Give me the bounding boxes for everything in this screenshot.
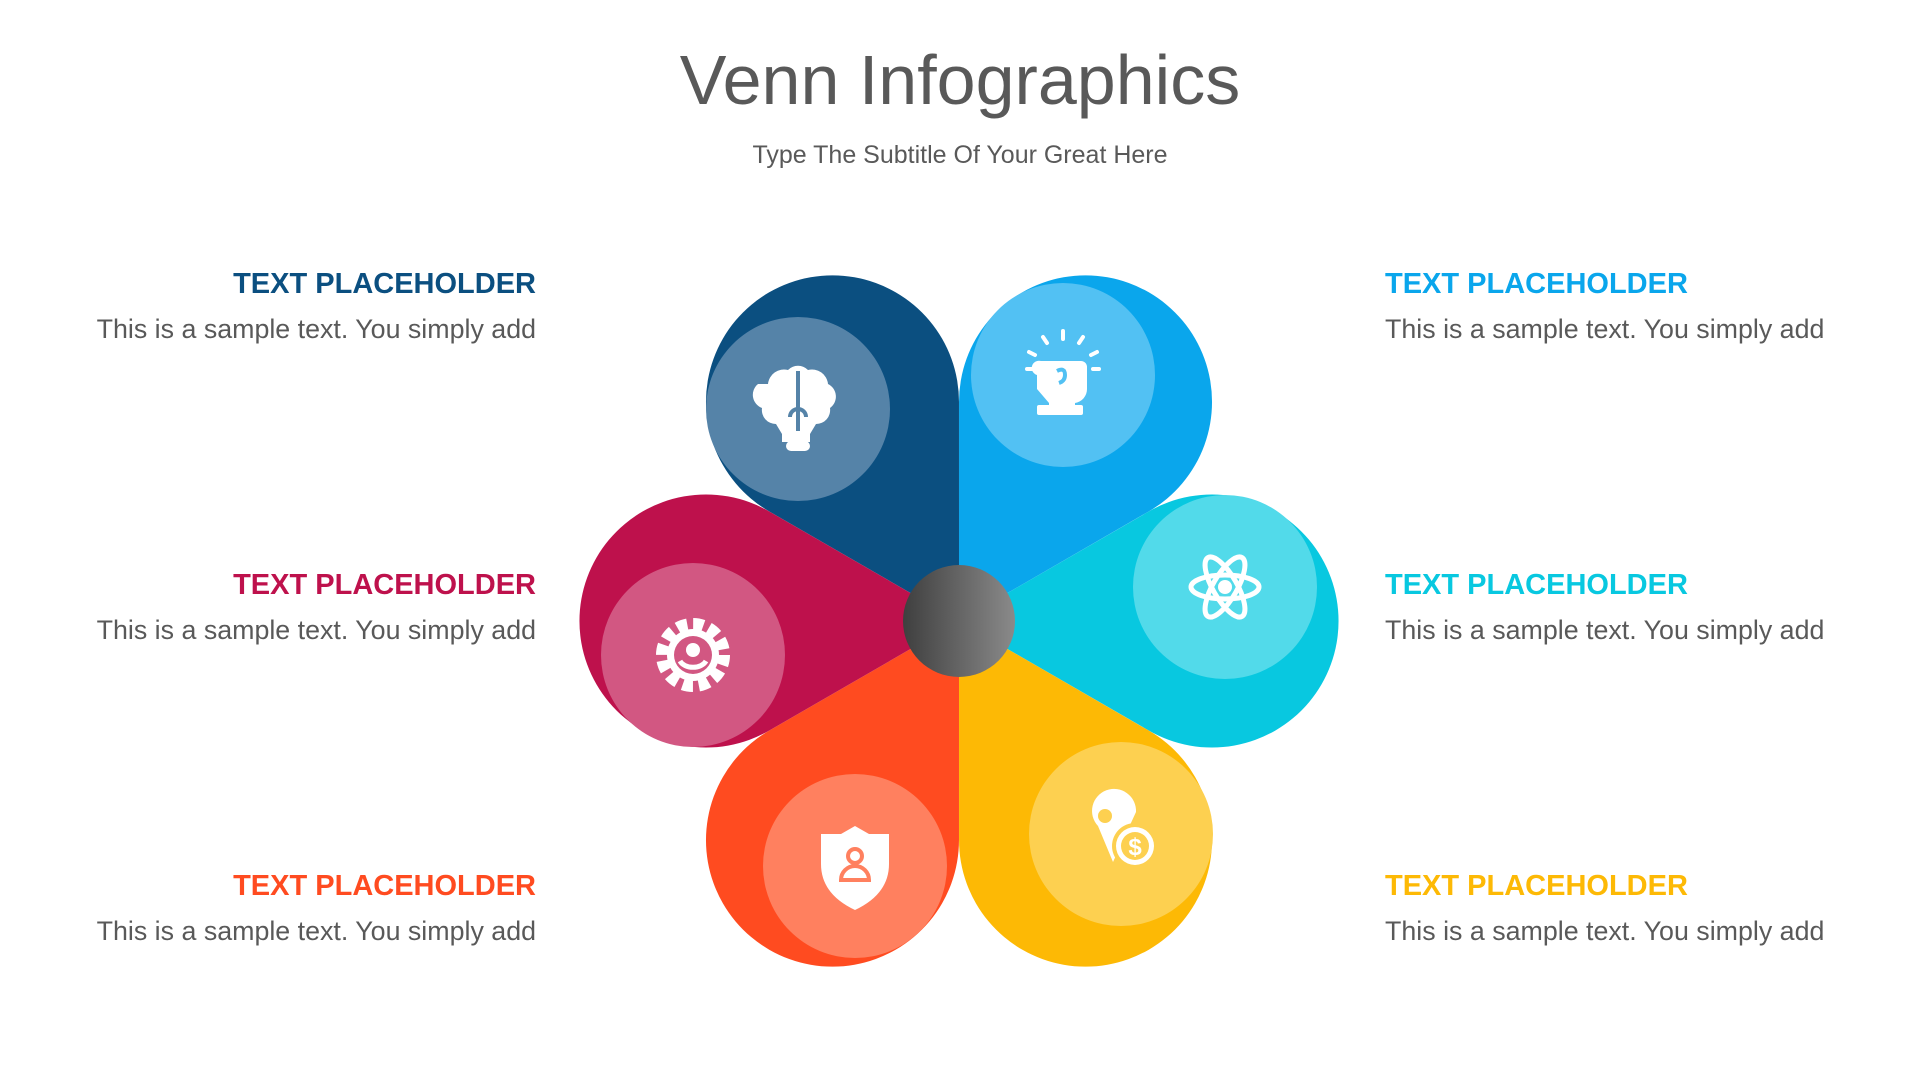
text block: bottom right: TEXT PLACEHOLDER <box>1385 870 1688 902</box>
text block: bottom right <box>1385 870 1824 946</box>
title: Venn Infographics <box>680 41 1240 119</box>
text block: middle left <box>97 569 536 645</box>
text block: top right <box>1385 268 1824 344</box>
text block: top right: TEXT PLACEHOLDER <box>1385 268 1688 300</box>
text block: bottom right: This is a sample text. You simply add <box>1385 916 1824 946</box>
text block: top right: This is a sample text. You simply add <box>1385 314 1824 344</box>
icon: gear person <box>663 625 723 685</box>
center circle <box>903 565 1015 677</box>
text block: top left <box>97 268 536 344</box>
petal: dark blue <box>660 229 1069 684</box>
text block: middle right: This is a sample text. You simply add <box>1385 615 1824 645</box>
petal: orange <box>660 558 1069 1013</box>
icon: brain bulb <box>753 366 836 451</box>
text block: middle right: TEXT PLACEHOLDER <box>1385 569 1688 601</box>
petal: cyan <box>959 494 1339 748</box>
text block: bottom left: This is a sample text. You simply add <box>97 916 536 946</box>
icon: shield person <box>821 826 889 910</box>
icon: fist <box>1027 331 1099 415</box>
icon: location dollar <box>1092 789 1158 869</box>
inner circles <box>601 283 1317 958</box>
icon: location dollar: $ <box>1128 834 1142 861</box>
petal: yellow <box>849 558 1258 1013</box>
text block: middle left: This is a sample text. You simply add <box>97 615 536 645</box>
text block: bottom left: TEXT PLACEHOLDER <box>233 870 536 902</box>
icon: atom <box>1191 552 1259 622</box>
text block: bottom left <box>97 870 536 946</box>
text block: top left: This is a sample text. You simply add <box>97 314 536 344</box>
text block: middle right <box>1385 569 1824 645</box>
text block: middle left: TEXT PLACEHOLDER <box>233 569 536 601</box>
text block: top left: TEXT PLACEHOLDER <box>233 268 536 300</box>
subtitle: Type The Subtitle Of Your Great Here <box>752 141 1168 169</box>
petal: blue <box>849 229 1258 684</box>
petal: crimson <box>579 494 959 748</box>
